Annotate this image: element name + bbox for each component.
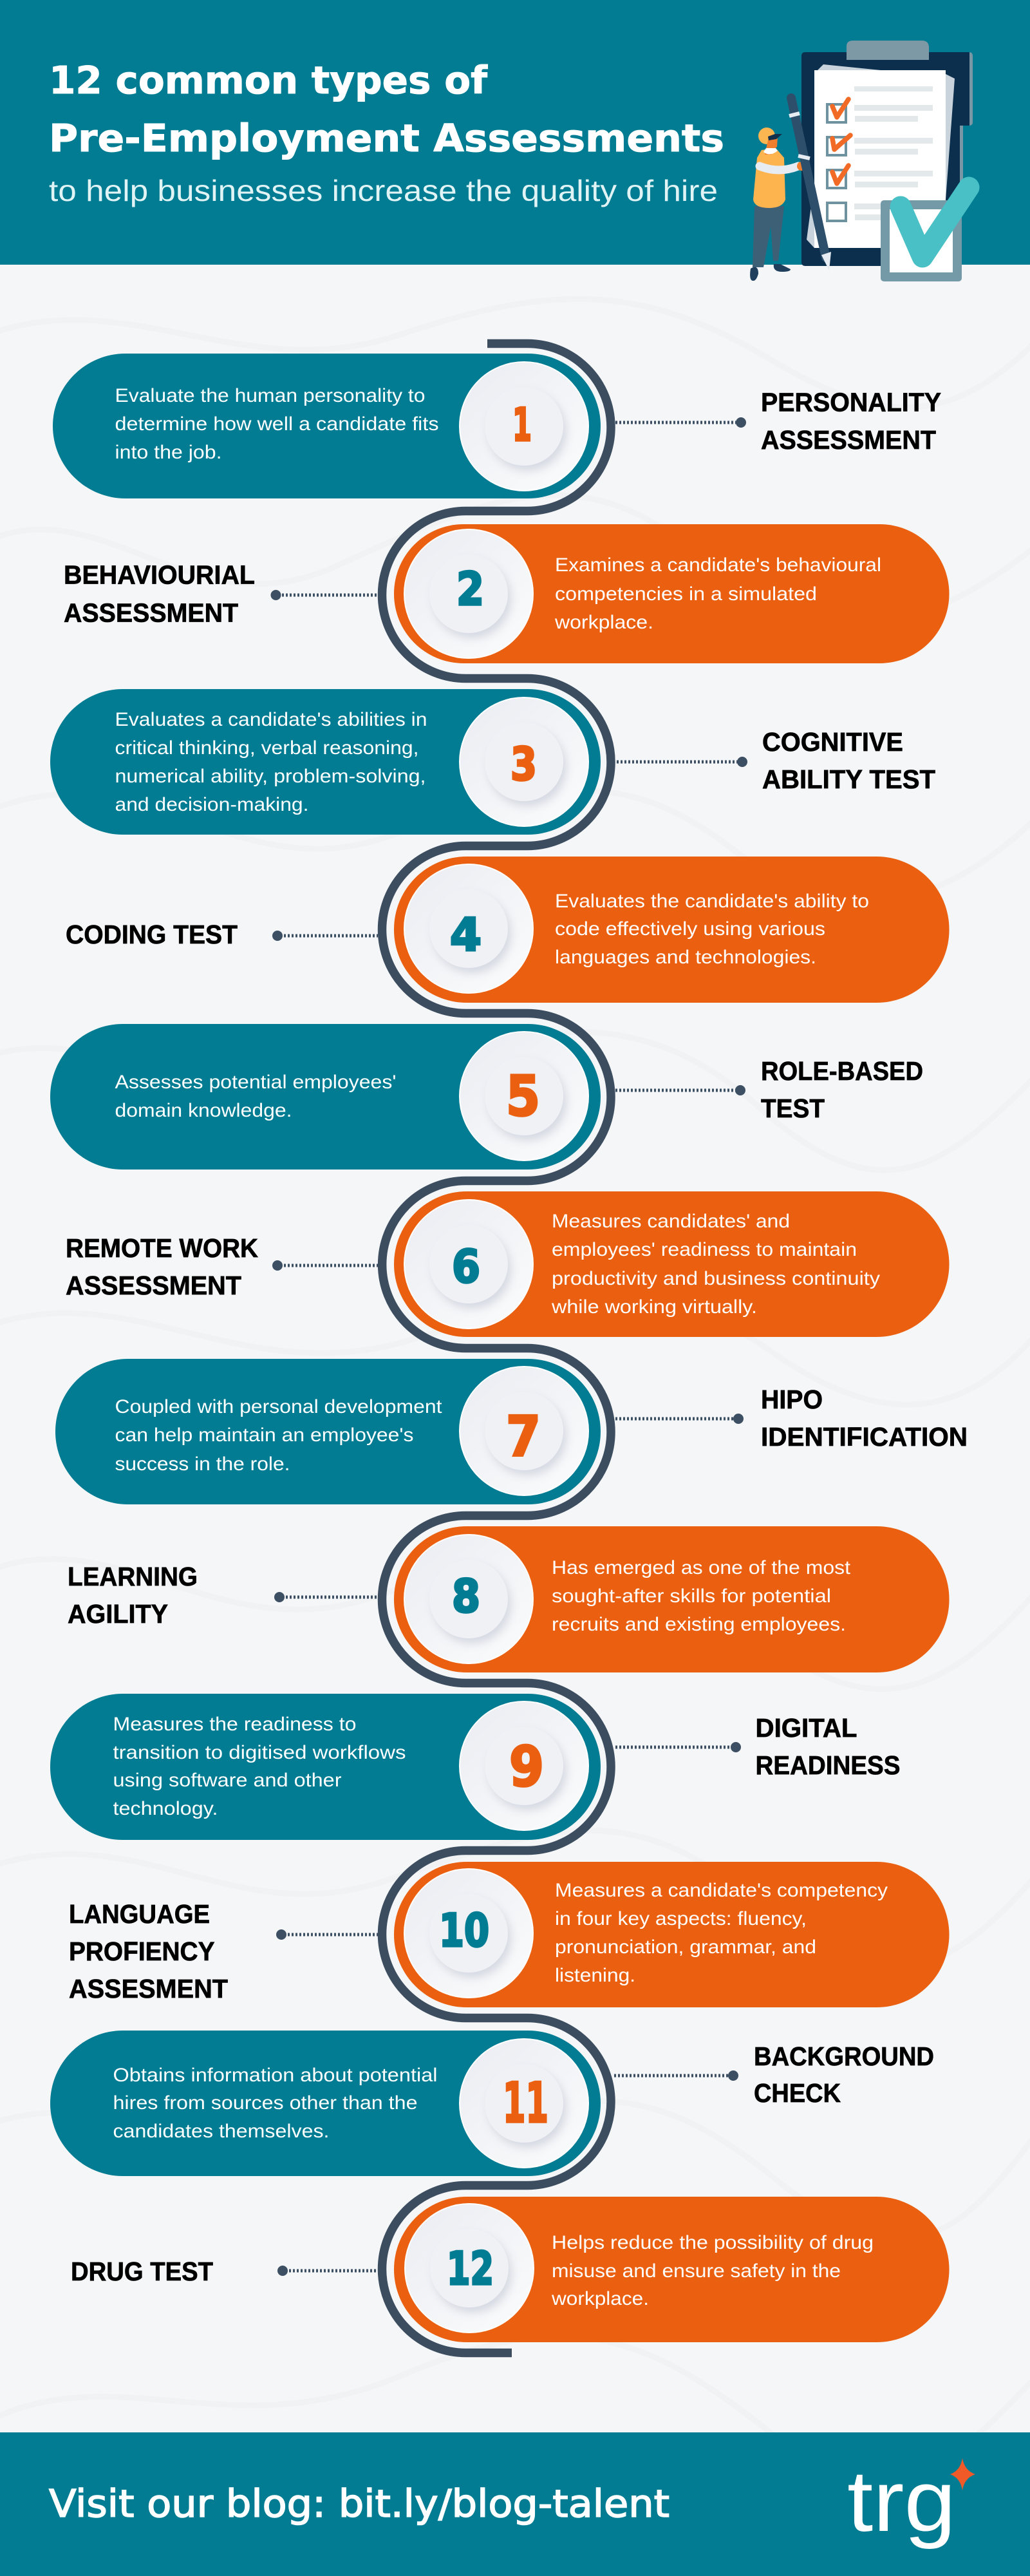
description: determine how well a candidate fits: [115, 413, 439, 435]
description: in four key aspects: fluency,: [555, 1908, 807, 1929]
number badge: [404, 1869, 533, 1998]
description: transition to digitised workflows: [113, 1742, 406, 1763]
pill: [394, 857, 949, 1003]
title line 2: Pre-Employment Assessments: [49, 116, 724, 160]
back paper sheets: [807, 64, 955, 248]
panel: step 2 behaviourial assessment: [64, 524, 949, 663]
number badge: [404, 1535, 533, 1663]
dotted leader: [617, 757, 747, 767]
description: [115, 1072, 397, 1121]
description: Examines a candidate's behavioural: [555, 554, 881, 576]
giant pencil: [791, 98, 826, 258]
number badge: [404, 864, 533, 993]
panel: step 10 language profiency assesment: [69, 1862, 949, 2007]
panel: step 4 coding test: [66, 857, 949, 1003]
label: IDENTIFICATION: [761, 1422, 968, 1452]
panel: step 8 learning agility: [68, 1526, 949, 1672]
description: hires from sources other than the: [113, 2092, 417, 2114]
description: Evaluates a candidate's abilities in: [115, 709, 427, 730]
description: critical thinking, verbal reasoning,: [115, 737, 418, 759]
label: ASSESSMENT: [66, 1271, 241, 1300]
description: [551, 1211, 880, 1318]
logo wordmark: trg: [847, 2452, 956, 2550]
number badge: 5: [506, 1065, 540, 1129]
description: Obtains information about potential: [113, 2065, 438, 2086]
description: Evaluates the candidate's ability to: [555, 891, 869, 912]
number badge: 2: [456, 563, 484, 616]
label: DRUG TEST: [71, 2257, 213, 2286]
number badge: 4: [450, 909, 482, 961]
pill: [55, 1359, 601, 1504]
label: [756, 1713, 900, 1780]
label: BACKGROUND: [754, 2041, 934, 2071]
label: PROFIENCY: [69, 1937, 215, 1966]
number badge: 6: [452, 1240, 480, 1293]
label: CHECK: [754, 2078, 841, 2108]
subtitle: to help businesses increase the quality of hire: [49, 174, 718, 207]
label: [761, 1385, 968, 1452]
logo: trg: [847, 2452, 975, 2550]
label: TEST: [761, 1094, 825, 1123]
description: pronunciation, grammar, and: [555, 1937, 816, 1958]
pill: [50, 2031, 601, 2176]
big check box: [881, 200, 962, 281]
label: HIPO: [761, 1385, 823, 1414]
person shoes: [750, 264, 791, 281]
big box inner: [890, 209, 953, 272]
description: languages and technologies.: [555, 947, 816, 968]
number badge: 8: [452, 1570, 480, 1623]
pill: [394, 1526, 949, 1672]
label: CODING TEST: [66, 920, 238, 949]
number badge: [460, 1367, 588, 1495]
description: Evaluate the human personality to: [115, 385, 425, 406]
label: AGILITY: [68, 1599, 168, 1629]
description: [555, 1880, 888, 1986]
number badge: [460, 1032, 588, 1160]
description: candidates themselves.: [113, 2121, 330, 2142]
label: LANGUAGE: [69, 1899, 210, 1929]
panel: step 7 hipo identification: [55, 1359, 968, 1504]
description: [113, 2065, 438, 2142]
label: READINESS: [756, 1750, 900, 1780]
header banner: [0, 0, 1030, 265]
number badge: 3: [510, 738, 537, 791]
text lines: [854, 86, 933, 220]
person face: [765, 137, 778, 155]
illustration: clipboard with person and checkmark: [750, 41, 973, 281]
label: [761, 388, 941, 455]
dotted leader: [274, 1592, 378, 1602]
paper: [814, 70, 946, 248]
number badge: [460, 1701, 588, 1830]
description: using software and other: [113, 1770, 341, 1791]
pill: [50, 1694, 601, 1840]
description: misuse and ensure safety in the: [552, 2260, 841, 2282]
pencil tip: [821, 252, 831, 270]
panel: step 6 remote work assessment: [66, 1191, 949, 1337]
person vest: [753, 148, 785, 208]
number badge: [460, 2039, 588, 2168]
panel: step 1 personality assessment: [53, 354, 941, 498]
label: [762, 727, 935, 794]
description: sought-after skills for potential: [552, 1586, 831, 1607]
footer banner: [0, 2432, 1030, 2576]
label: [68, 1562, 198, 1629]
label: [66, 1233, 258, 1300]
dotted leader: [615, 1085, 745, 1095]
description: [115, 385, 439, 463]
panel: step 5 role-based test: [50, 1024, 923, 1170]
number badge: 1: [512, 399, 532, 451]
clip: [847, 41, 929, 60]
label: [754, 2041, 934, 2108]
checkbox list: [827, 104, 846, 221]
description: and decision-making.: [115, 794, 309, 815]
number badge: 10: [439, 1904, 489, 1957]
person collar: [763, 148, 778, 155]
description: domain knowledge.: [115, 1100, 292, 1121]
pill: [394, 1862, 949, 2007]
label: ASSESMENT: [69, 1974, 228, 2003]
label: [69, 1899, 228, 2003]
description: can help maintain an employee's: [115, 1425, 413, 1446]
number badge: 12: [447, 2242, 494, 2295]
clipboard board: [801, 52, 969, 266]
description: productivity and business continuity: [552, 1268, 880, 1289]
panel: step 12 drug test: [71, 2197, 949, 2342]
number badge: 9: [509, 1735, 544, 1799]
description: workplace.: [554, 612, 653, 633]
description: Helps reduce the possibility of drug: [552, 2232, 874, 2253]
person helmet: [758, 128, 775, 144]
pill: [50, 689, 601, 835]
pill: [394, 2197, 949, 2342]
pill: [53, 354, 601, 498]
description: technology.: [113, 1798, 218, 1819]
person legs: [753, 206, 784, 267]
pill: [50, 1024, 601, 1170]
label: ASSESSMENT: [761, 425, 936, 455]
description: recruits and existing employees.: [552, 1614, 846, 1635]
pill: [394, 524, 949, 663]
description: employees' readiness to maintain: [552, 1239, 857, 1260]
label: [761, 1056, 923, 1123]
description: success in the role.: [115, 1454, 290, 1475]
label: DIGITAL: [756, 1713, 857, 1743]
pencil bands: [789, 113, 810, 158]
description: Assesses potential employees': [115, 1072, 397, 1093]
person hand: [797, 162, 806, 171]
dotted leader: [276, 1929, 378, 1940]
description: Coupled with personal development: [115, 1396, 442, 1417]
title line 1: 12 common types of: [49, 58, 488, 102]
description: workplace.: [551, 2288, 649, 2309]
dotted leader: [614, 2070, 738, 2081]
number badge: [404, 529, 533, 658]
pill: [394, 1191, 949, 1337]
label: COGNITIVE: [762, 727, 903, 757]
person arms: [760, 166, 798, 170]
description: listening.: [555, 1965, 635, 1986]
number badge: [460, 362, 588, 491]
dotted leader: [615, 1742, 741, 1752]
description: into the job.: [115, 442, 221, 463]
label: ROLE-BASED: [761, 1056, 923, 1086]
description: while working virtually.: [551, 1296, 757, 1318]
person visor: [768, 134, 782, 140]
label: LEARNING: [68, 1562, 198, 1591]
description: Measures a candidate's competency: [555, 1880, 888, 1901]
dotted leader: [615, 417, 746, 428]
label: ASSESSMENT: [64, 598, 238, 627]
description: Measures candidates' and: [552, 1211, 790, 1232]
label: [64, 560, 255, 627]
label: PERSONALITY: [761, 388, 941, 417]
panel: step 11 background check: [50, 2031, 934, 2176]
number badge: [460, 697, 588, 826]
dotted leader: [272, 1260, 378, 1271]
description: [113, 1714, 406, 1819]
description: Measures the readiness to: [113, 1714, 357, 1735]
dotted leader: [277, 2266, 378, 2276]
dotted leader: [272, 931, 378, 941]
panel: step 3 cognitive ability test: [50, 689, 935, 835]
label: REMOTE WORK: [66, 1233, 258, 1263]
panel: step 9 digital readiness: [50, 1694, 900, 1840]
description: numerical ability, problem-solving,: [115, 766, 426, 787]
description: [552, 1557, 851, 1635]
label: BEHAVIOURIAL: [64, 560, 255, 590]
number badge: [405, 2204, 534, 2333]
big teal tick: [901, 187, 969, 257]
serpentine connector line: [382, 344, 611, 2353]
description: code effectively using various: [555, 918, 825, 940]
description: [555, 891, 869, 968]
clipboard back: [959, 52, 973, 184]
number badge: 7: [506, 1405, 541, 1469]
description: competencies in a simulated: [555, 583, 817, 605]
dotted leader: [270, 590, 378, 600]
dotted leader: [615, 1414, 744, 1424]
description: Has emerged as one of the most: [552, 1557, 851, 1578]
footer link text: Visit our blog: bit.ly/blog-talent: [49, 2481, 670, 2526]
description: [551, 2232, 874, 2309]
number badge: [404, 1200, 533, 1329]
logo star: [950, 2458, 975, 2490]
description: [115, 1396, 442, 1475]
description: [554, 554, 881, 633]
label: ABILITY TEST: [762, 764, 935, 794]
number badge: 11: [503, 2071, 548, 2136]
description: [115, 709, 427, 815]
orange ticks: [832, 99, 850, 184]
